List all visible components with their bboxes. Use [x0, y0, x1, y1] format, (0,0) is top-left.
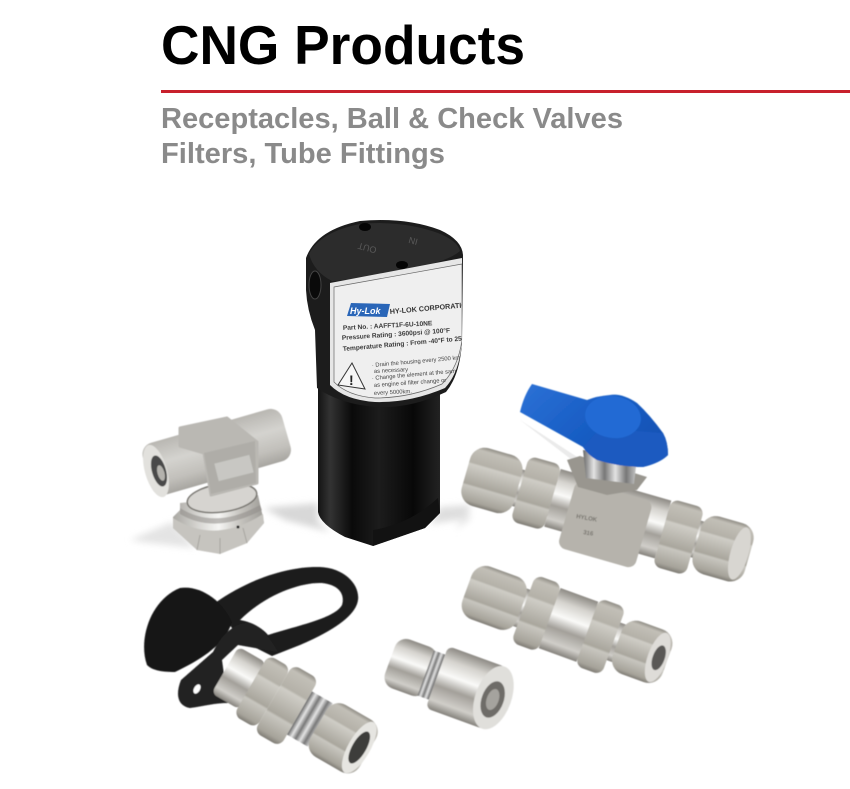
check valve	[455, 554, 679, 695]
end bore	[138, 442, 174, 500]
filter housing: IN	[408, 235, 419, 247]
second hex	[254, 664, 319, 747]
handle knob	[582, 392, 644, 442]
center block	[557, 480, 653, 569]
collar ring	[185, 479, 259, 517]
quick-connect receptacle	[379, 629, 522, 735]
part specs	[342, 320, 462, 352]
valve barrel assembly	[453, 440, 759, 599]
tee fitting	[138, 406, 294, 554]
bleed hole	[236, 526, 240, 528]
maintenance notes: as necessary	[374, 367, 408, 375]
subtitle: Receptacles, Ball & Check Valves	[161, 103, 623, 135]
steel assembly	[206, 636, 388, 787]
maintenance notes: · Drain the housing every 2500 km	[372, 355, 461, 369]
left hex	[510, 456, 562, 530]
Hy-Lok logo: Hy-Lok	[350, 306, 381, 316]
cap top face	[309, 223, 460, 281]
black cap	[306, 220, 463, 407]
right hex	[653, 499, 705, 575]
body markings: HYLOK	[576, 514, 598, 524]
side cylinder	[140, 406, 294, 498]
receptacle body	[426, 646, 507, 729]
right end face	[723, 525, 756, 582]
connecting tubes	[507, 468, 710, 560]
left hex	[511, 575, 562, 652]
company name: HY-LOK CORPORATION	[389, 300, 472, 316]
block front face	[204, 441, 256, 494]
maintenance notes: every 5000km.	[374, 389, 412, 397]
stem flange	[567, 456, 647, 495]
ball valve	[453, 384, 759, 599]
threads	[287, 691, 333, 747]
outlet bore	[639, 630, 676, 685]
warning triangle: !	[349, 372, 354, 388]
necks	[512, 588, 629, 663]
top bolt holes	[359, 223, 371, 231]
part specs: Pressure Rating : 3600psi @ 100°F	[342, 326, 450, 342]
floor shadows	[130, 503, 470, 548]
maintenance notes: · Change the element at the same time	[372, 367, 472, 382]
right nut	[608, 616, 677, 687]
nose barrel	[381, 636, 440, 699]
body markings	[576, 514, 598, 538]
rubber strap	[215, 567, 358, 656]
left nut	[457, 562, 531, 634]
product label	[330, 258, 472, 402]
engraved port markings: OUT	[356, 240, 378, 255]
right nut	[689, 513, 757, 585]
compression nut	[304, 698, 383, 778]
maintenance notes	[372, 356, 460, 396]
title: CNG Products	[161, 14, 525, 76]
maintenance notes: as engine oil filter change or	[374, 378, 447, 389]
bulkhead fitting with dust cap	[144, 567, 388, 787]
threaded port	[465, 660, 522, 735]
threaded stem	[583, 450, 637, 484]
body markings: 316	[583, 530, 594, 538]
handle shadow	[520, 420, 640, 475]
base nut	[173, 495, 264, 554]
engraved logo	[214, 455, 254, 481]
first hex	[233, 655, 291, 728]
left nut	[458, 444, 526, 517]
cap flange tab	[178, 623, 278, 708]
central block	[180, 418, 257, 495]
part specs: Temperature Rating : From -40°F to 257°F	[342, 334, 472, 353]
inlet port	[309, 271, 321, 299]
body tube	[544, 469, 671, 558]
center barrel	[539, 588, 598, 662]
rear body	[212, 647, 266, 709]
nut bore	[335, 717, 383, 778]
filter housing	[306, 220, 472, 546]
blue handle	[520, 384, 668, 467]
page canvas	[134, 24, 850, 774]
subtitle: Filters, Tube Fittings	[161, 138, 445, 170]
handle lower face	[583, 428, 668, 467]
red rule	[161, 90, 850, 93]
right hex	[575, 598, 626, 675]
tab hole	[192, 683, 202, 695]
subtitle	[161, 103, 623, 170]
part specs: Part No. : AAFFT1F-6U-10NE	[343, 320, 433, 332]
groove	[417, 650, 447, 700]
black lower body	[318, 380, 440, 546]
dust cap	[144, 588, 232, 672]
